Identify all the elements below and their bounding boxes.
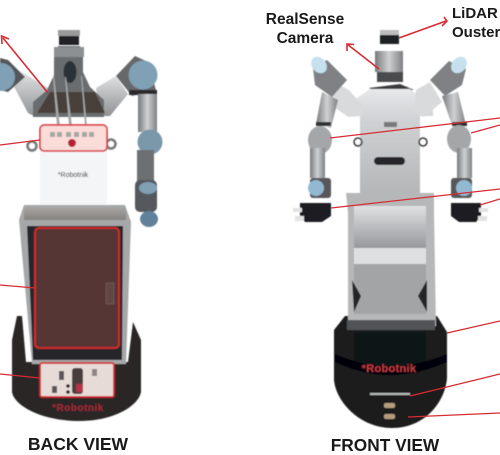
highlight: back control panel [40, 125, 107, 151]
front base [334, 316, 447, 428]
back base [12, 316, 141, 421]
front torso logo [374, 157, 405, 165]
front lidar [380, 30, 399, 44]
front torso [347, 89, 433, 196]
label: LiDAR Ouster: Ouster [452, 24, 500, 41]
arrow: back camera [2, 36, 48, 93]
line: back base panel [0, 374, 40, 378]
label: RealSense Camera: Camera [277, 30, 334, 47]
label: LiDAR Ouster: LiDAR [452, 5, 498, 22]
line: front right arm [471, 125, 500, 133]
arrow: realsense camera [347, 44, 379, 69]
back head [33, 46, 105, 126]
front base logo: *Robotnik [362, 363, 417, 375]
back right arm [96, 56, 162, 227]
robot: front view [293, 30, 488, 428]
line: back control panel [0, 140, 40, 145]
front left arm [308, 54, 362, 198]
back base logo: *Robotnik [52, 403, 104, 414]
heading: front view: FRONT VIEW [331, 435, 440, 455]
back rings [28, 140, 116, 150]
heading: back view: BACK VIEW [28, 434, 129, 454]
back left arm [0, 58, 48, 117]
robot: back view [0, 30, 162, 421]
line: front left gripper [331, 189, 500, 208]
front right arm [414, 54, 472, 198]
front right gripper [451, 203, 488, 222]
line: front right gripper [480, 199, 500, 205]
back upper panel: *Robotnik [58, 172, 89, 179]
front base ports [384, 403, 395, 419]
front rings [354, 138, 427, 146]
front torso label plate [384, 122, 397, 127]
label: RealSense Camera: RealSense [266, 11, 345, 28]
back upper panel [40, 125, 107, 216]
back lidar [58, 30, 80, 45]
highlight: back base panel [40, 363, 114, 397]
line: front left arm [330, 118, 500, 138]
front head [369, 51, 414, 90]
line: base sensor [447, 321, 500, 333]
line: back screen [0, 285, 35, 288]
front left gripper [293, 203, 331, 222]
arrow: lidar [399, 17, 447, 38]
front cabinet [346, 193, 436, 330]
highlight: back screen [35, 228, 119, 348]
back cabinet [19, 205, 131, 364]
line: base ports [408, 413, 500, 417]
line: base light [410, 374, 500, 396]
